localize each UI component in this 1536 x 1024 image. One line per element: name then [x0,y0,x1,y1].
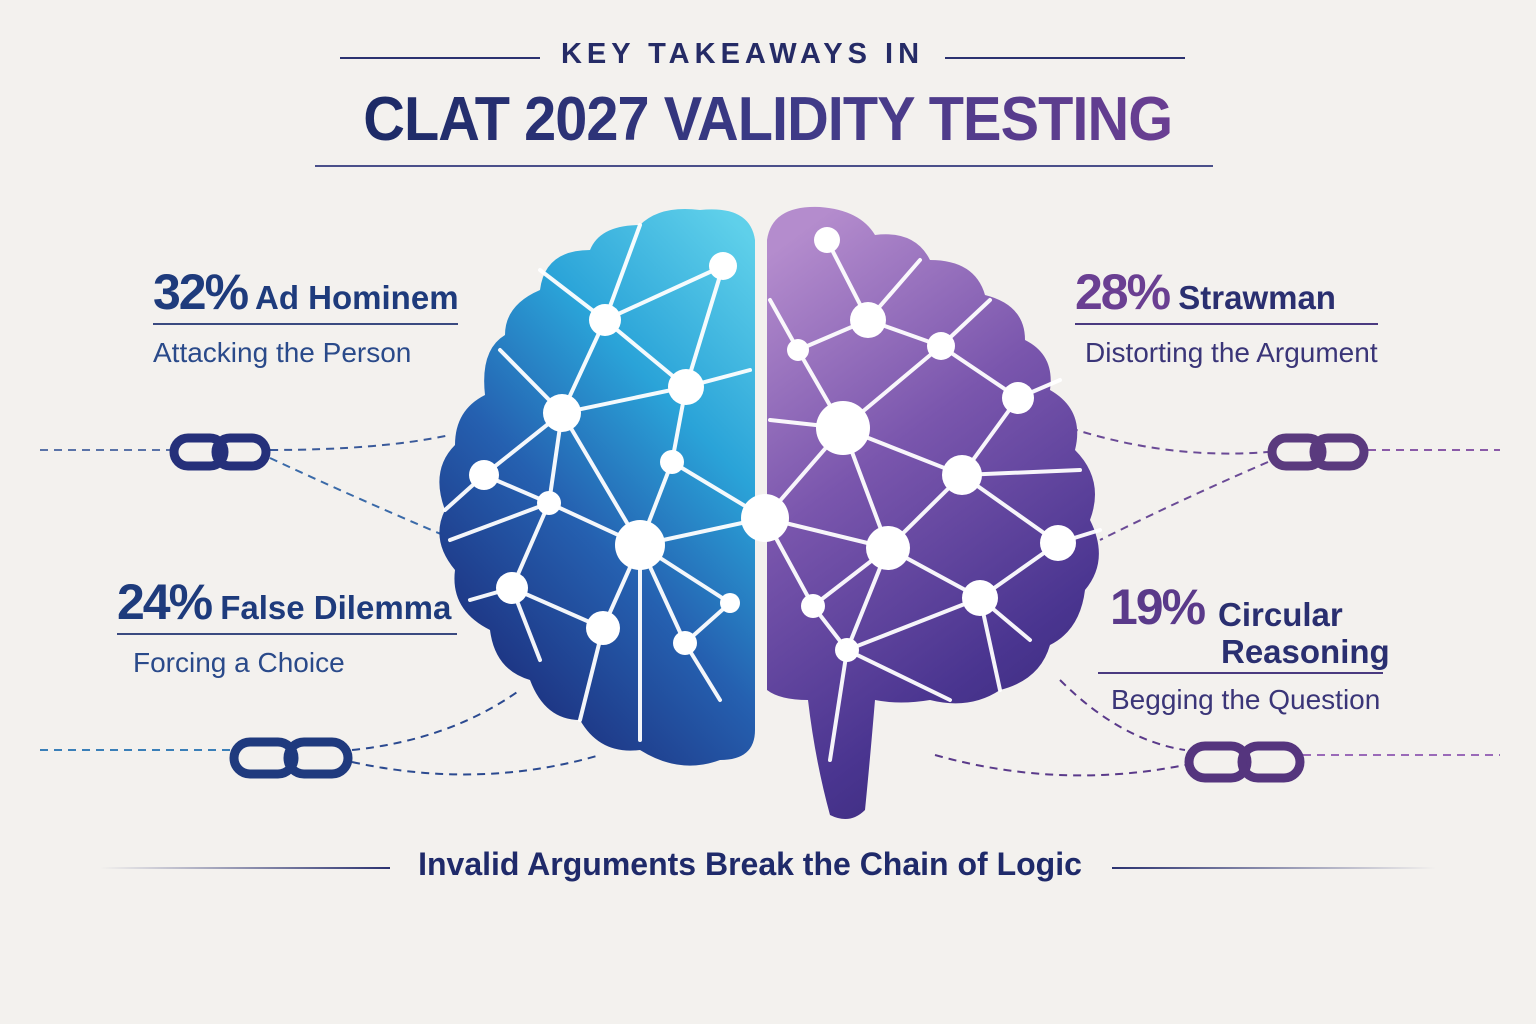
callout: ad hominem: 32% Ad Hominem [153,264,459,320]
title: CLAT 2027 VALIDITY TESTING [363,85,1172,154]
callout: circular reasoning: Reasoning [1221,633,1390,670]
callout: circular reasoning [1098,579,1390,715]
footer tagline: Invalid Arguments Break the Chain of Logic [418,846,1082,882]
brain right hemisphere [767,207,1099,819]
dashed connectors [40,428,1500,775]
callout: circular reasoning: Begging the Question [1111,684,1380,715]
callout: circular reasoning: 19% [1110,579,1204,635]
callout: strawman: Distorting the Argument [1085,337,1378,368]
callout: false dilemma: Forcing a Choice [133,647,345,678]
callout: circular reasoning: Circular [1218,596,1343,633]
callout: strawman [1075,264,1378,368]
callout: ad hominem [153,264,459,368]
header: kicker: KEY TAKEAWAYS IN [561,38,924,70]
brain left hemisphere [439,209,755,766]
callout: false dilemma: 24% False Dilemma [117,574,451,630]
chain icons [174,438,1364,778]
callout: strawman: 28% Strawman [1075,264,1336,320]
nodes [469,227,1076,662]
network lines [445,225,1100,760]
callout: ad hominem: Attacking the Person [153,337,411,368]
callout: false dilemma [117,574,457,678]
